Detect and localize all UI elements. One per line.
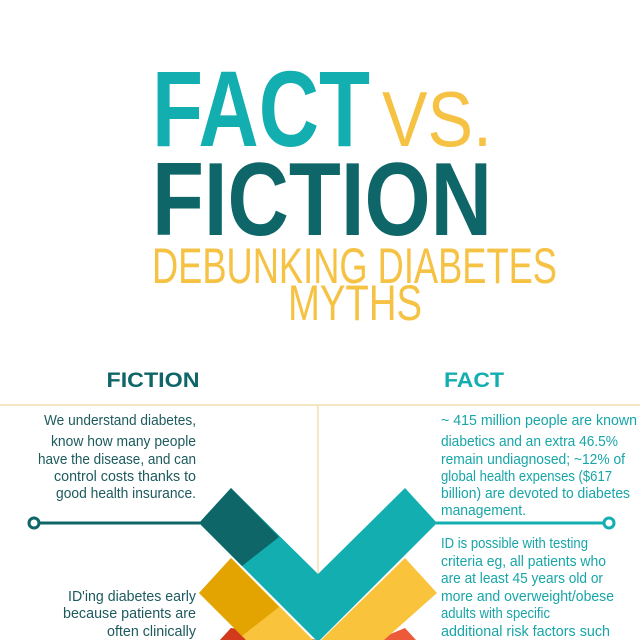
fiction text 1: We understand diabetes, bbox=[44, 413, 196, 429]
title: FACT bbox=[152, 48, 370, 169]
fiction text 2 bbox=[63, 589, 197, 640]
subtitle: MYTHS bbox=[288, 275, 422, 331]
fiction text 1: control costs thanks to bbox=[54, 469, 196, 485]
title: VS. bbox=[382, 75, 492, 163]
fact text 2: are at least 45 years old or bbox=[441, 571, 603, 587]
title bbox=[152, 48, 492, 258]
fiction text 2: often clinically bbox=[107, 624, 197, 640]
fact text 2: ID is possible with testing bbox=[441, 536, 588, 552]
heading: fiction: FICTION bbox=[106, 369, 200, 392]
connector right bbox=[436, 518, 614, 528]
fact text 2: criteria eg, all patients who bbox=[441, 554, 606, 570]
title: FICTION bbox=[152, 142, 492, 258]
fact text 1: billion) are devoted to diabetes bbox=[441, 486, 630, 502]
fact text 1: diabetics and an extra 46.5% bbox=[441, 434, 618, 450]
fact text 1 bbox=[441, 413, 637, 519]
fact text 1: management. bbox=[441, 503, 526, 519]
fiction text 1 bbox=[38, 413, 196, 502]
red chevron bbox=[199, 628, 437, 640]
fact text 1: global health expenses ($617 bbox=[441, 469, 612, 485]
fact text 2: additional risk factors such bbox=[441, 624, 610, 640]
fiction text 2: ID'ing diabetes early bbox=[68, 589, 197, 605]
chevron graphic bbox=[199, 488, 437, 640]
connector left bbox=[29, 518, 200, 528]
fiction text 1: have the disease, and can bbox=[38, 452, 196, 468]
teal chevron bbox=[199, 488, 437, 640]
fact text 2: more and overweight/obese bbox=[441, 589, 614, 605]
subtitle bbox=[152, 238, 557, 331]
heading: fact: FACT bbox=[444, 369, 504, 392]
fiction text 2: because patients are bbox=[63, 606, 196, 622]
yellow chevron bbox=[199, 558, 437, 640]
fiction text 1: know how many people bbox=[51, 434, 196, 450]
fact text 1: remain undiagnosed; ~12% of bbox=[441, 452, 626, 468]
fiction text 1: good health insurance. bbox=[56, 486, 196, 502]
fact text 2 bbox=[441, 536, 614, 640]
fact text 2: adults with specific bbox=[441, 606, 550, 622]
fact text 1: ~ 415 million people are known bbox=[441, 413, 637, 429]
